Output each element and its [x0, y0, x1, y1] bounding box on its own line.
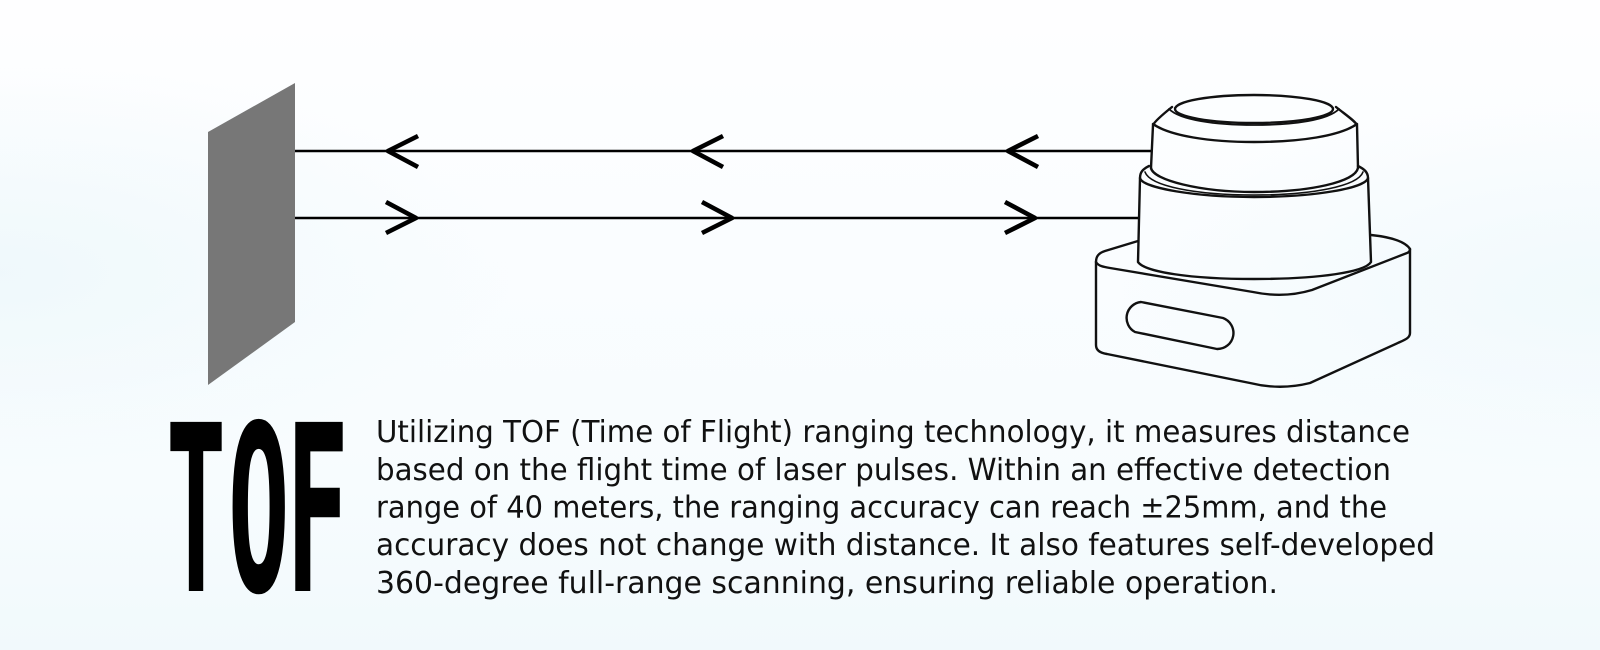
base window slot — [1127, 302, 1233, 349]
description text: 360-degree full-range scanning, ensuring reliable operation. — [376, 566, 1278, 601]
description text — [376, 415, 1435, 601]
TOF heading: T — [166, 377, 226, 647]
returning beam line with left arrows — [295, 136, 1151, 167]
description text: range of 40 meters, the ranging accuracy can reach ±25mm, and the — [376, 490, 1387, 526]
outgoing beam line with right arrows — [295, 202, 1138, 233]
description text: based on the flight time of laser pulses. Within an effective detection — [376, 453, 1391, 488]
TOF heading — [166, 377, 349, 647]
TOF heading: F — [286, 377, 349, 646]
description text: accuracy does not change with distance. It also features self-developed — [376, 528, 1435, 563]
lower cylinder — [1138, 166, 1371, 279]
outgoing and returning laser beams — [295, 136, 1151, 233]
TOF heading: O — [228, 377, 289, 647]
lidar sensor illustration — [1096, 95, 1410, 387]
upper cap — [1151, 95, 1358, 192]
base block — [1096, 235, 1410, 387]
target panel — [208, 83, 295, 385]
description text: Utilizing TOF (Time of Flight) ranging technology, it measures distance — [376, 415, 1410, 450]
